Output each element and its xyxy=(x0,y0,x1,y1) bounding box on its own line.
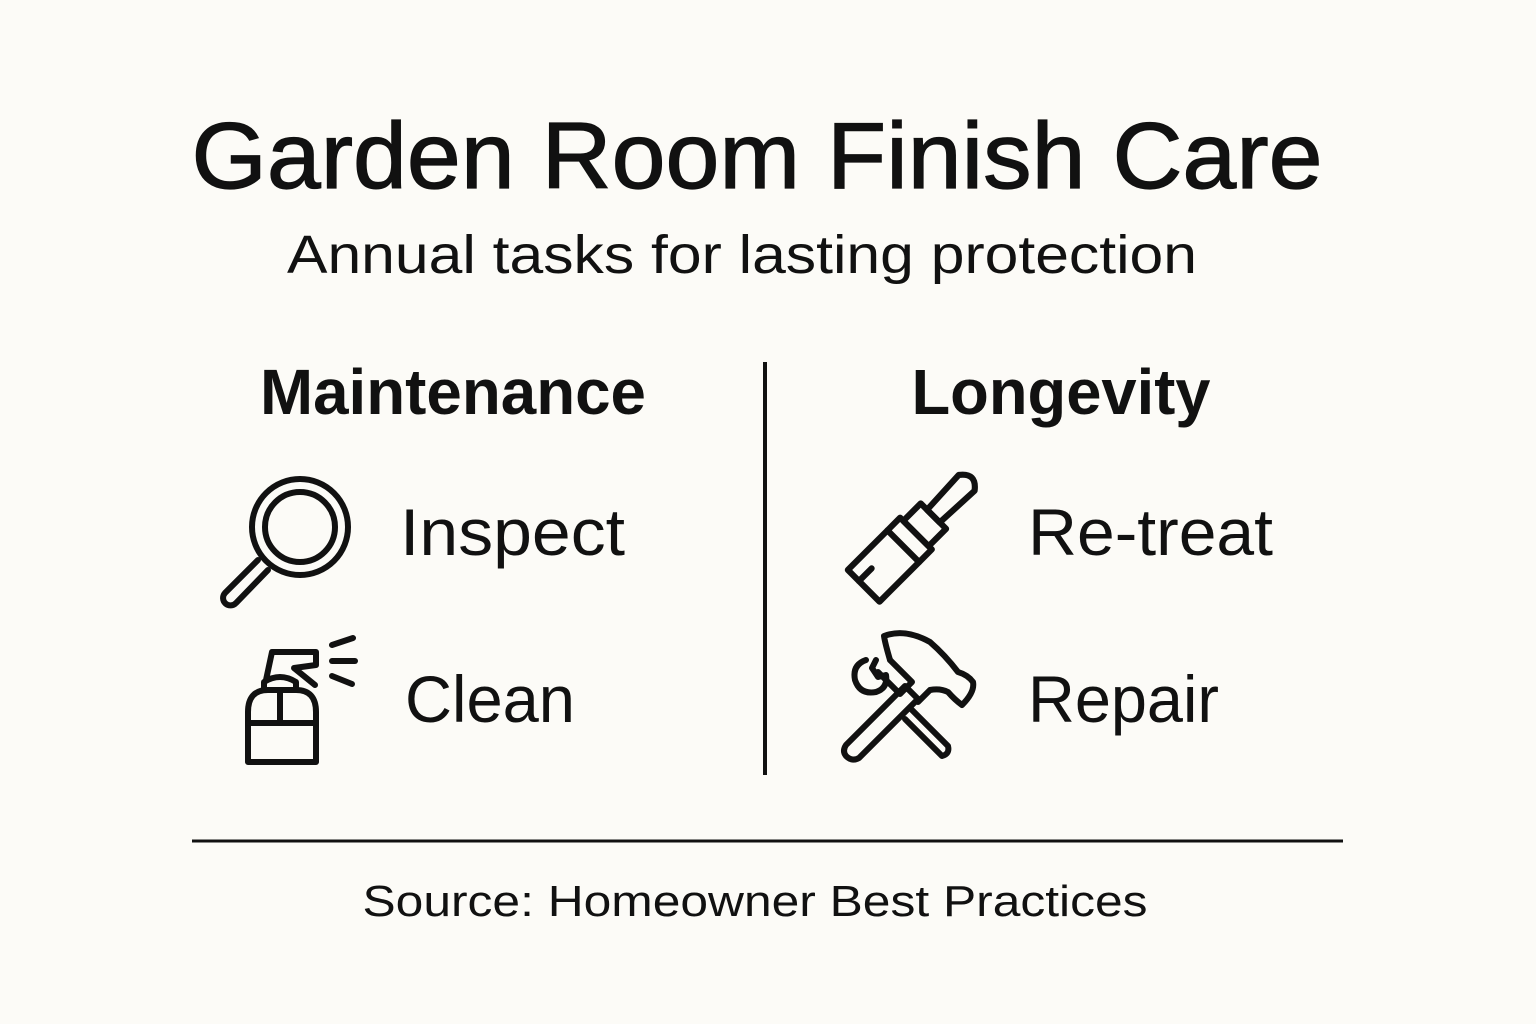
icon: paintbrush xyxy=(848,462,988,602)
icon: magnifier xyxy=(223,479,348,605)
subtitle: Annual tasks for lasting protection xyxy=(287,225,1197,285)
title: Garden Room Finish Care xyxy=(192,103,1322,208)
label: Repair: Repair xyxy=(1028,662,1219,736)
label: Inspect: Inspect xyxy=(400,495,625,569)
source note: Source: Homeowner Best Practices xyxy=(362,877,1148,926)
icon: hammer and wrench xyxy=(844,633,973,760)
icon: spray bottle xyxy=(248,638,355,762)
label: Re-treat: Re-treat xyxy=(1028,495,1273,569)
heading: Maintenance: Maintenance xyxy=(260,356,646,428)
label: Clean: Clean xyxy=(405,662,575,736)
heading: Longevity: Longevity xyxy=(912,356,1211,428)
